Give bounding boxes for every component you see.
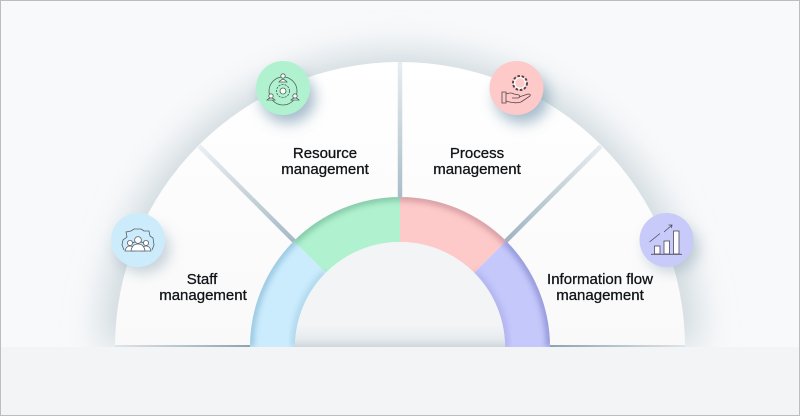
ring [250, 197, 550, 347]
semicircle panel [115, 62, 685, 347]
icon badge: resource [256, 61, 315, 123]
label: resource management: Resource [293, 145, 357, 162]
ring inner shading [250, 197, 550, 347]
label: process management: management [433, 161, 522, 178]
divider: staff and resource [199, 146, 297, 244]
ring segment: staff [250, 241, 326, 347]
label: staff management: Staff [187, 271, 218, 288]
ring interior [295, 242, 505, 347]
divider: process and information flow [503, 146, 601, 244]
label: process management: Process [450, 145, 504, 162]
label: information flow management: management [556, 287, 645, 304]
icon: hand holding gear [502, 76, 530, 103]
divider: resource and process [398, 62, 402, 198]
icon: cycle with people and gear [267, 74, 299, 105]
icon badge: staff [111, 213, 170, 273]
ring segment: resource [294, 197, 400, 273]
label: resource management: management [281, 161, 370, 178]
panel shadow [100, 51, 700, 347]
label: information flow management: Information flow [547, 271, 653, 288]
ring segment: process [400, 197, 506, 273]
label: staff management: management [159, 287, 248, 304]
icon: gear with people [122, 229, 154, 251]
base shadow line [115, 345, 685, 347]
icon badge: process [490, 61, 549, 123]
floor [0, 347, 800, 416]
ring segment: information flow [474, 241, 550, 347]
icon badge: information flow [640, 213, 699, 272]
icon: rising bar chart [650, 225, 682, 254]
